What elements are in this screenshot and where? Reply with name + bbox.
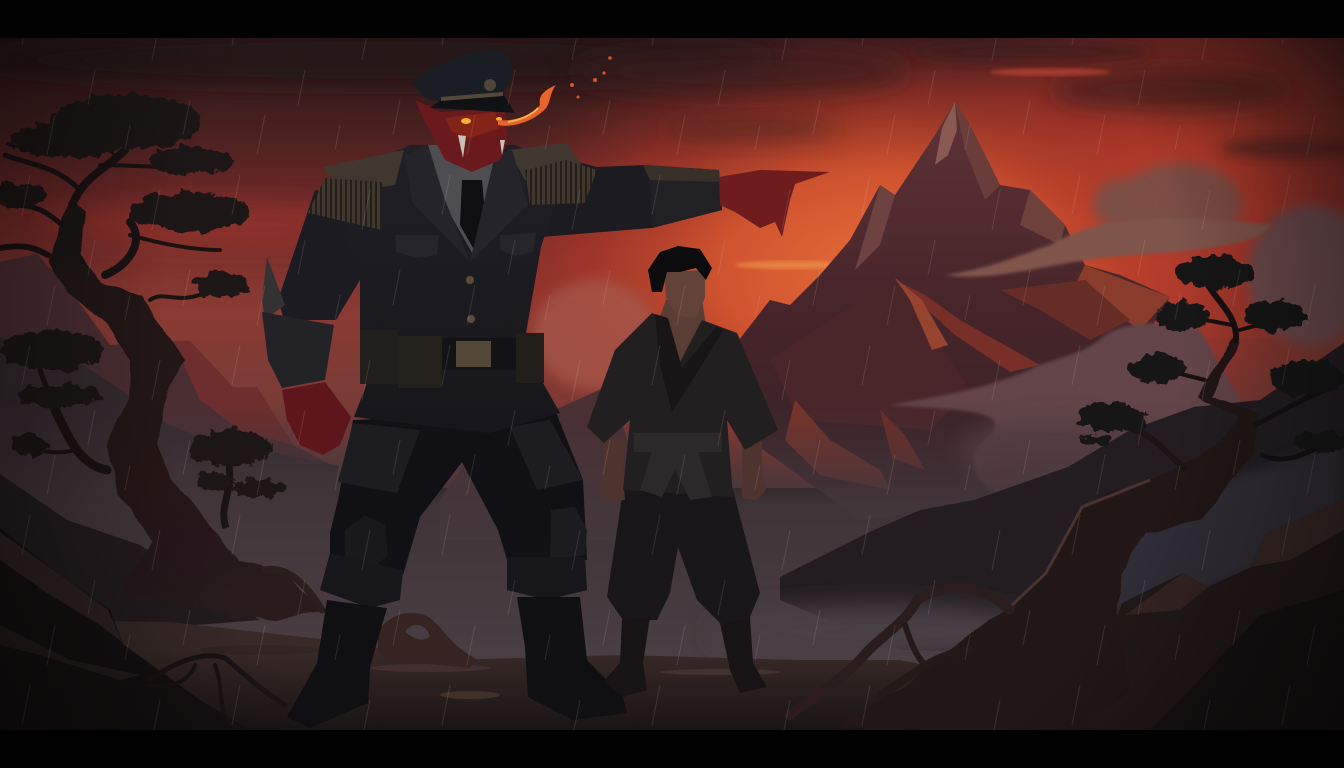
foliage [0, 94, 252, 457]
boots [603, 617, 767, 697]
sash [634, 433, 722, 500]
trousers [607, 490, 760, 623]
hair [648, 246, 712, 292]
bracer [262, 312, 334, 388]
flame breath [498, 56, 612, 126]
main mountain [735, 102, 1170, 520]
right tree [790, 255, 1344, 730]
boy [587, 246, 778, 697]
legs [330, 410, 587, 575]
gaiters [320, 553, 587, 608]
distant left mountains [0, 254, 345, 600]
pockets [395, 233, 536, 258]
left root tangle [150, 656, 285, 728]
lower left hill [0, 474, 260, 640]
hanging arm [278, 190, 378, 320]
pointing hand [719, 170, 830, 237]
trunk [840, 337, 1258, 730]
buttons [466, 276, 475, 323]
clouds around mountain [890, 219, 1270, 500]
ground [0, 620, 1344, 730]
sky [0, 34, 1344, 488]
mountain facets [770, 102, 1170, 490]
pointing arm [535, 160, 722, 237]
rock arch [378, 613, 478, 668]
trunk rim light [1010, 480, 1150, 607]
collar [655, 314, 724, 412]
oni officer [262, 50, 830, 728]
face [664, 270, 705, 318]
head [415, 100, 508, 172]
hill left of boy [440, 385, 640, 540]
belt [360, 330, 544, 388]
branches and roots [790, 280, 1325, 715]
small distant tree left [190, 430, 284, 528]
foliage [1076, 255, 1344, 452]
lapels [405, 145, 528, 262]
right mid hill [780, 343, 1344, 660]
fog band at right hill base [710, 440, 1344, 660]
gi top [587, 313, 778, 497]
cuff [645, 165, 722, 228]
boots [287, 597, 627, 728]
left tree [0, 94, 322, 620]
right foreground rocks [1010, 500, 1344, 730]
blade [262, 257, 285, 320]
neck [658, 300, 706, 365]
forearms and fists [598, 440, 766, 502]
officer cap [412, 50, 515, 113]
fist [282, 382, 351, 455]
branches [0, 150, 322, 610]
fog valley [0, 400, 1344, 690]
coat [345, 145, 565, 433]
shirt and tie [428, 145, 498, 258]
trunk [47, 200, 322, 620]
left foreground rocks [0, 528, 250, 730]
epaulettes [308, 143, 597, 230]
large right cloud behind mountain [1094, 163, 1344, 345]
